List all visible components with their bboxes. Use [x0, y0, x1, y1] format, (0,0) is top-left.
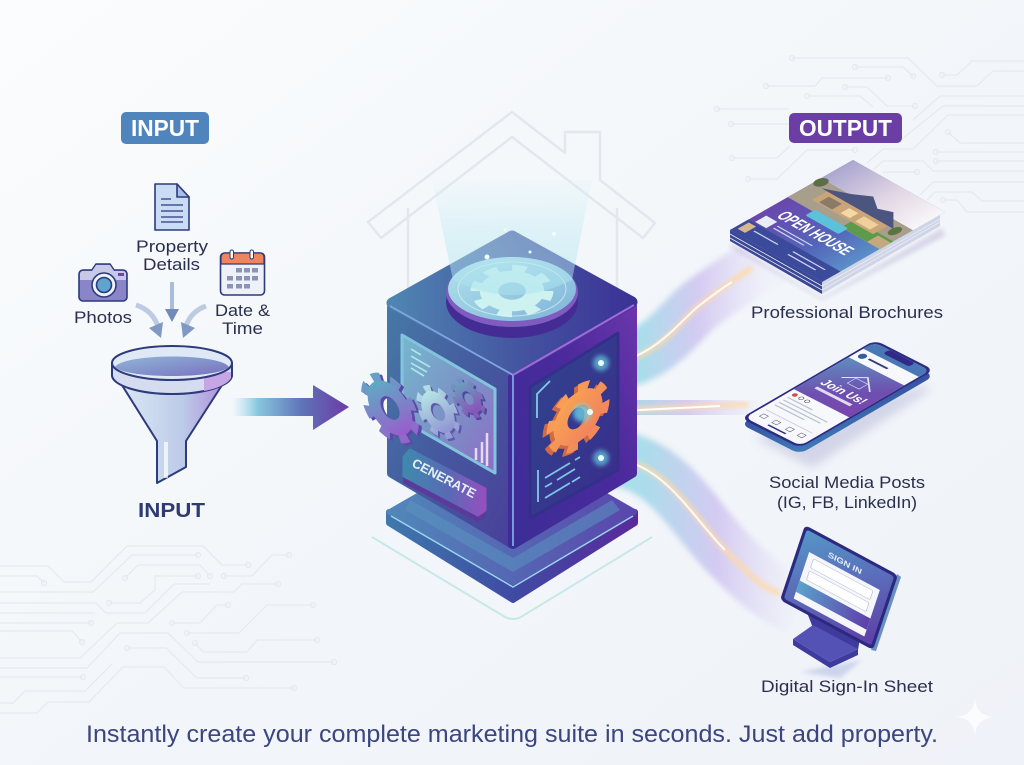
stream: to social: [600, 403, 760, 412]
circuit pattern: top right: [714, 56, 1024, 212]
brochure cover: [729, 159, 945, 282]
label: property details: Property: [136, 237, 209, 256]
label: date and time: Time: [222, 319, 263, 338]
generate button: CENERATE: [410, 455, 479, 501]
gear 1: [365, 367, 418, 451]
label: professional brochures: Professional Brochures: [751, 303, 943, 322]
tablet screen: [780, 525, 898, 650]
right screen: [530, 333, 618, 518]
brochure stack: [729, 159, 945, 300]
glowing nodes: [573, 355, 609, 466]
label: date and time: [215, 301, 271, 338]
open house title: OPEN HOUSE: [772, 209, 858, 258]
machine base: [372, 442, 652, 619]
phone screen: [741, 340, 934, 448]
machine left face: [392, 307, 513, 544]
circuit pattern: bottom left: [0, 546, 336, 713]
input badge: INPUT: [131, 115, 199, 141]
top disc: [446, 257, 578, 338]
phone: [741, 340, 934, 468]
tablet stand: [793, 610, 862, 678]
generate button: [403, 450, 486, 522]
label: social media posts: [769, 473, 925, 512]
label: date and time: Date &: [215, 301, 271, 320]
icon: calendar: [220, 250, 264, 295]
icon: camera: [79, 264, 127, 301]
label: social media posts: (IG, FB, LinkedIn): [777, 493, 917, 512]
tagline: Instantly create your complete marketing suite in seconds. Just add property.: [86, 721, 938, 748]
icon: funnel: [112, 346, 232, 483]
sign in heading: SIGN IN: [827, 550, 863, 576]
machine right face: [513, 306, 632, 544]
label: input: INPUT: [138, 500, 205, 522]
label: property details: [136, 237, 209, 274]
orange gear: [547, 373, 605, 464]
tablet edge: [871, 574, 901, 651]
big arrow to machine: [232, 385, 349, 430]
house outline behind machine: [368, 112, 655, 320]
light beam: [432, 180, 592, 295]
label: digital sign-in sheet: Digital Sign-In Sheet: [761, 677, 933, 696]
left gears: [365, 367, 485, 451]
left screen: [402, 335, 495, 473]
stream: to brochures: [600, 258, 775, 363]
join us title: Join Us!: [816, 377, 872, 406]
label: photos: Photos: [74, 308, 132, 327]
gear 2: [419, 381, 459, 445]
arrows into funnel: [136, 282, 206, 338]
stream: to sign-in: [600, 458, 800, 608]
machine: [365, 180, 652, 619]
label: social media posts: Social Media Posts: [769, 473, 925, 492]
phone edge: [741, 346, 934, 454]
input badge: [121, 112, 209, 144]
gear 3: [453, 375, 485, 423]
output badge: OUTPUT: [799, 115, 892, 141]
sparkle: [956, 698, 994, 736]
output streams: [600, 258, 800, 608]
machine top face: [392, 236, 632, 370]
sign-in tablet: [780, 525, 901, 678]
label: property details: Details: [143, 255, 200, 274]
icon: document: [155, 184, 189, 230]
